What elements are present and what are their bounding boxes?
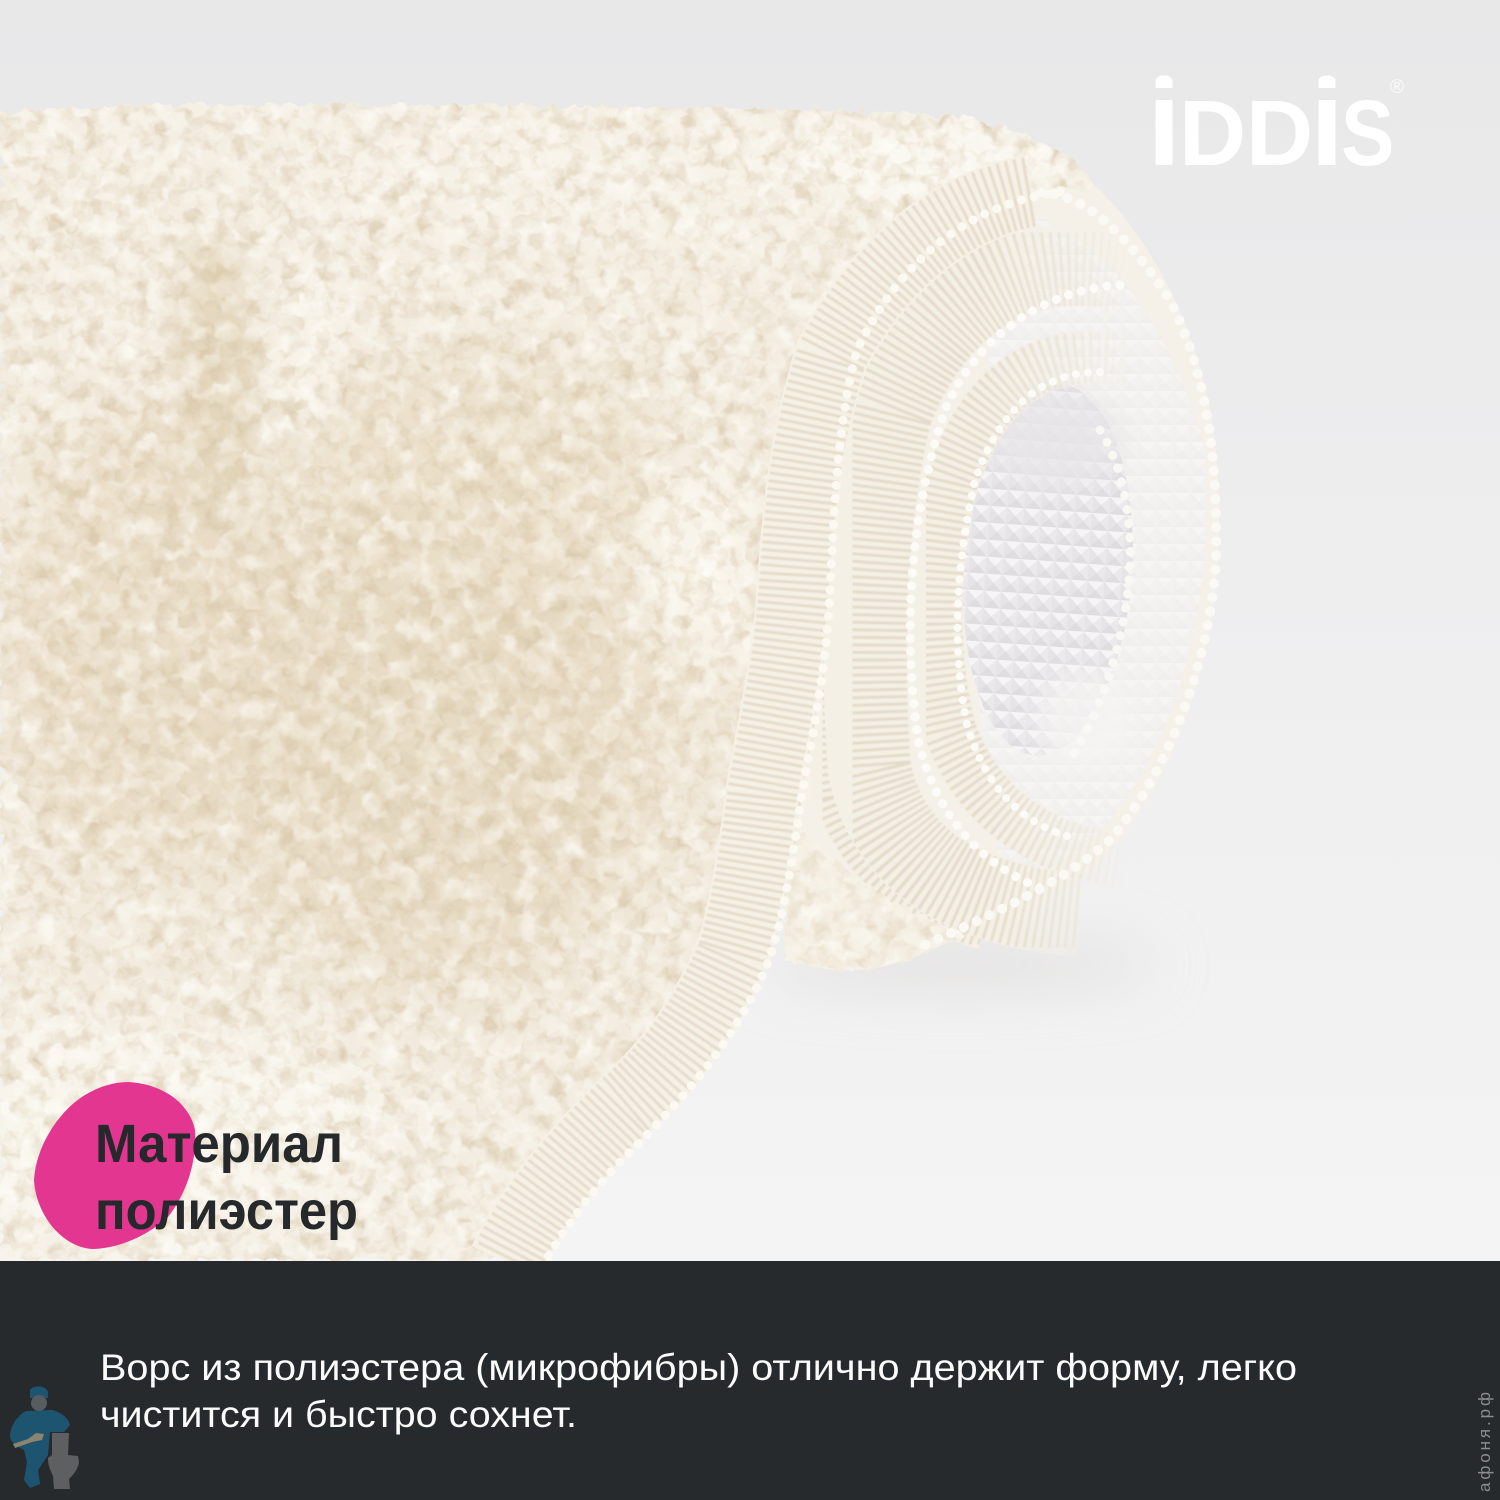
inner opening xyxy=(951,379,1145,761)
bound edge of the mat xyxy=(505,192,1060,1262)
caption text: Ворс из полиэстера (микрофибры) отлично держит форму, легко xyxy=(100,1347,1297,1388)
tonal areas xyxy=(200,450,660,990)
iddis logo: i xyxy=(1147,55,1181,192)
mat pile surface xyxy=(0,90,1110,1270)
site watermark: афоня.рф xyxy=(1475,1392,1494,1492)
floor shadow xyxy=(760,943,1160,987)
caption text xyxy=(100,1347,1297,1435)
iddis logo xyxy=(1156,76,1404,166)
ribbed band 2 lower extension xyxy=(831,540,985,925)
callout heading: Материал xyxy=(95,1114,343,1174)
caption text second line: чистится и быстро сохнет. xyxy=(100,1394,577,1435)
toilet xyxy=(48,1433,79,1489)
callout heading xyxy=(95,1114,358,1241)
plumber face xyxy=(31,1395,47,1411)
edge bead line xyxy=(546,192,1060,1260)
pile visible under the roll xyxy=(784,832,965,972)
ribbed band 2 xyxy=(866,265,1130,915)
photo: rolled bath mat xyxy=(0,90,1219,1270)
dark caption panel xyxy=(0,1261,1500,1500)
bead line: outer ring xyxy=(925,192,1216,945)
iddis logo: i xyxy=(1310,55,1344,192)
wrench xyxy=(13,1433,44,1448)
ribbed band 3 xyxy=(936,357,1130,862)
plumber figure xyxy=(10,1386,70,1488)
iddis logo: D xyxy=(1246,81,1313,185)
pile curls xyxy=(0,90,1110,1270)
pink blob xyxy=(34,1082,195,1249)
rubber backing waffle xyxy=(960,215,1207,870)
rolled end of the mat xyxy=(780,150,1219,980)
icon: plumber with toilet watermark xyxy=(10,1386,79,1489)
bead line: ring 3 xyxy=(958,372,1100,838)
registered mark: ® xyxy=(1390,77,1404,98)
iddis logo: S xyxy=(1341,81,1394,185)
bead line: ring 2 xyxy=(910,285,1120,892)
iddis logo: D xyxy=(1179,81,1246,185)
callout heading second line: полиэстер xyxy=(95,1181,358,1241)
hole rim beads xyxy=(1070,430,1130,760)
